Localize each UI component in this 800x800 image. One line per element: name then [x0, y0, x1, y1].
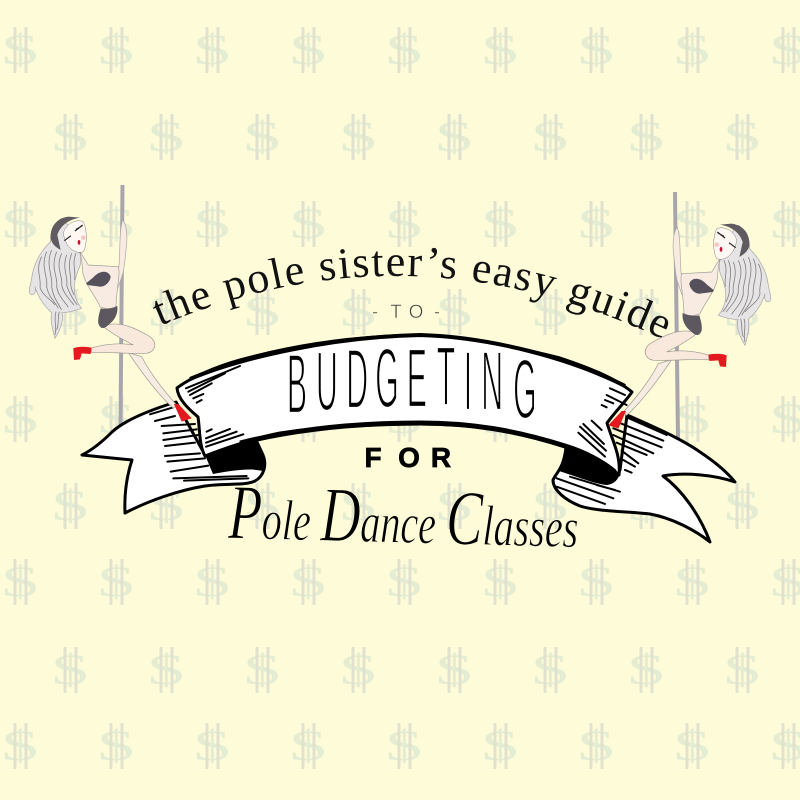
- dancer: bra: [86, 272, 111, 287]
- dancer: hair: [29, 218, 82, 338]
- dancer: hair strands: [39, 250, 77, 335]
- ribbon: right hatching: [557, 388, 667, 504]
- dancer: face: [63, 221, 86, 252]
- heading: Pole Dance Classes: Pole Dance Classes: [227, 470, 580, 565]
- ribbon: main band: [177, 335, 632, 475]
- heading: FOR: FOR: [364, 442, 451, 473]
- background pattern: dollar signs: $$$$$$$$: [52, 113, 760, 160]
- illustration: right pole dancer: [608, 224, 771, 429]
- ribbon: thick lower edge: [240, 423, 615, 472]
- background pattern: dollar signs: $$$$$$$$: [52, 482, 760, 529]
- ribbon: black fold right: [559, 446, 620, 485]
- dancer: neck and torso: [80, 252, 119, 309]
- background pattern: dollar signs: $$$$$$$$$: [2, 200, 800, 247]
- dancer: briefs: [98, 306, 117, 328]
- right pole: [675, 192, 678, 440]
- illustration: left pole dancer: [29, 217, 192, 422]
- left pole: [120, 185, 122, 428]
- dancer: lower leg to toe shoe: [128, 353, 177, 408]
- background pattern: dollar signs: $$$$$$$$$: [2, 558, 800, 605]
- background pattern: dollar signs: $$$$$$$$$: [2, 26, 800, 73]
- ribbon: right tail: [553, 415, 735, 542]
- dancer: back shoe: [73, 347, 92, 360]
- dancer: eyes and mouth: [64, 225, 83, 241]
- ribbon: black fold left: [205, 441, 264, 474]
- subtitle: to: -TO-: [372, 302, 440, 323]
- heading: BUDGETING: BUDGETING: [287, 330, 537, 437]
- ribbon banner: [82, 335, 735, 542]
- ribbon: left tail: [82, 402, 265, 513]
- ribbon: left hatching: [150, 366, 248, 481]
- dancer: dark hairline: [51, 217, 80, 250]
- background pattern: dollar signs: $$$$$$$$: [52, 646, 760, 693]
- background pattern: dollar signs: $$$$$$$$: [52, 288, 760, 335]
- dancer: bent leg: [91, 324, 155, 353]
- title: the pole sister's easy guide: the pole sister’s easy guide: [153, 248, 668, 338]
- dancer: cheek: [81, 235, 86, 240]
- dancer: raised arm: [106, 220, 127, 300]
- background pattern: dollar signs: $$$$$$$$$: [2, 395, 800, 442]
- background pattern: dollar signs: $$$$$$$$$: [2, 722, 800, 769]
- ribbon: thick upper edge: [190, 335, 625, 386]
- dancer: toe shoe: [174, 404, 192, 422]
